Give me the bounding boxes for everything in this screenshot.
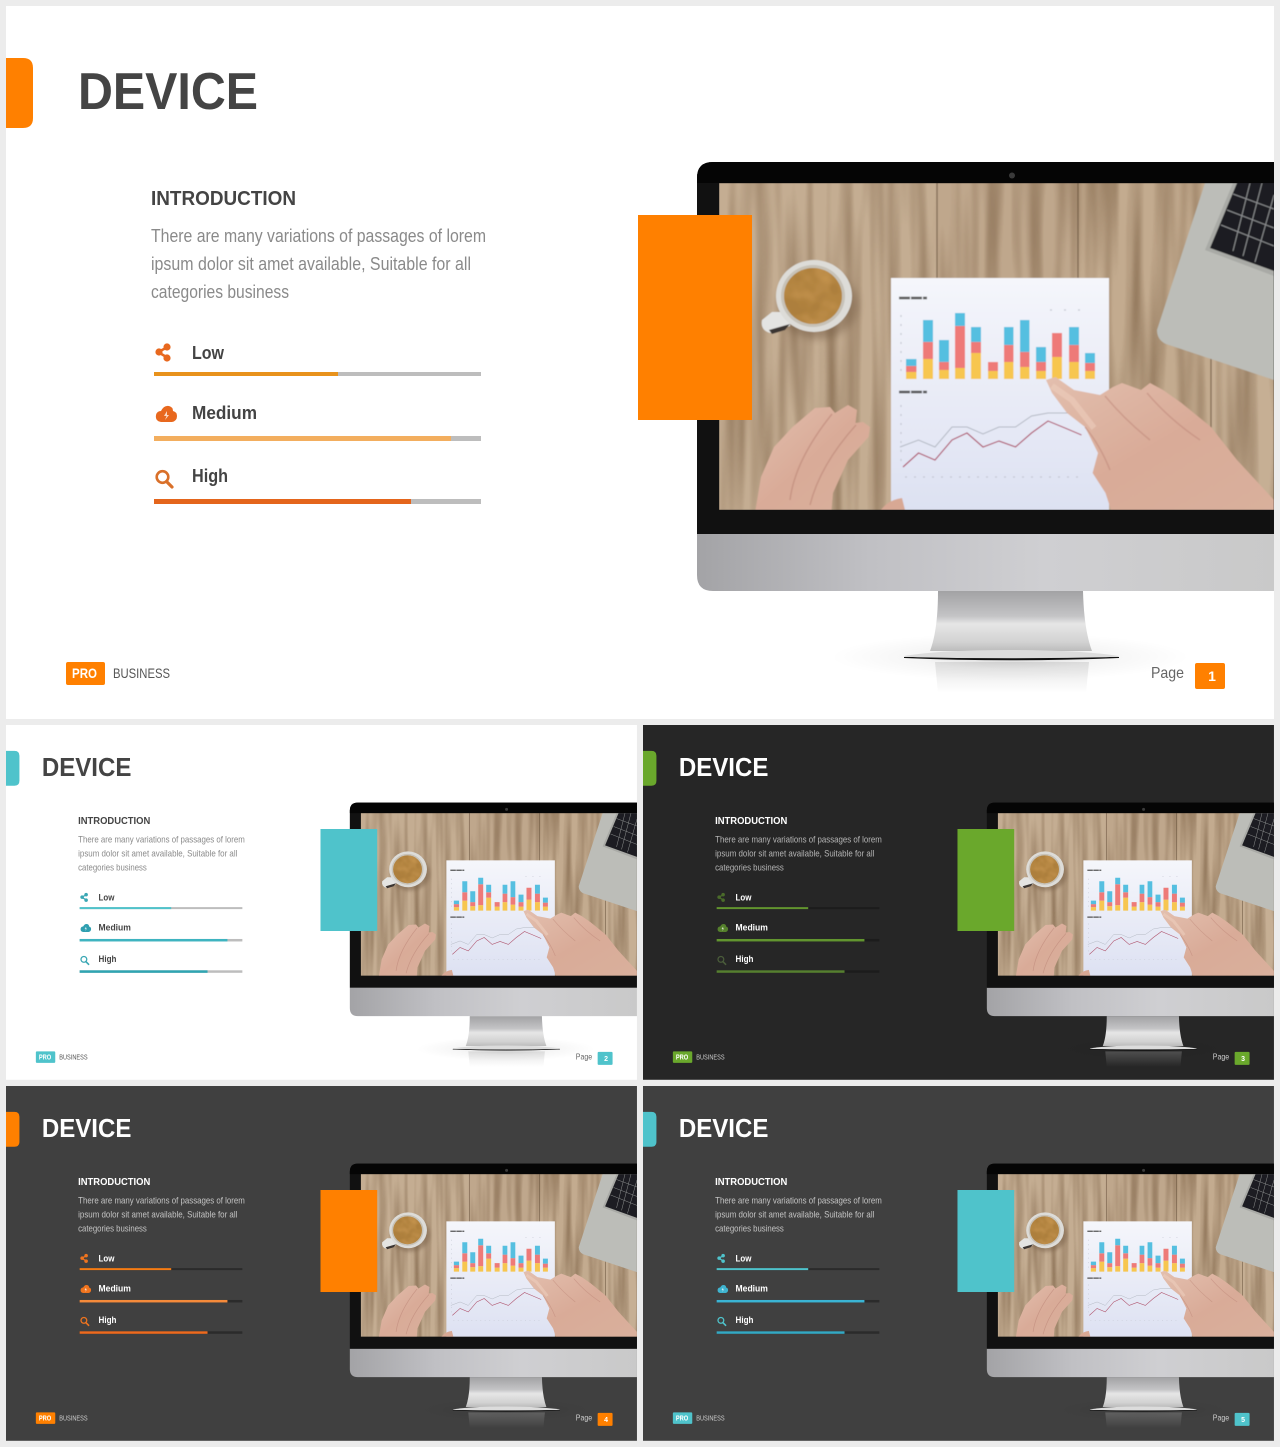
- slide 1: white orange large: [6, 6, 1274, 719]
- title tab: [6, 751, 19, 786]
- title tab: [6, 1112, 19, 1147]
- paragraph: [715, 1195, 882, 1233]
- title tab: [6, 58, 33, 128]
- meter: low: Low: [192, 343, 225, 363]
- meter: medium: [717, 923, 879, 941]
- paragraph: [78, 834, 245, 872]
- meter: high: High: [99, 954, 116, 964]
- paragraph: ipsum dolor sit amet available, Suitable for all: [78, 848, 237, 858]
- meter: medium: [154, 403, 481, 441]
- paragraph: There are many variations of passages of lorem: [151, 226, 486, 246]
- meter: high: High: [736, 954, 753, 964]
- paragraph: categories business: [78, 862, 147, 872]
- monitor: [987, 803, 1274, 1067]
- paragraph: categories business: [715, 862, 784, 872]
- meter: high: [154, 466, 481, 504]
- accent rectangle: [957, 829, 1014, 931]
- footer brand: PRO: [72, 665, 97, 681]
- paragraph: [715, 834, 882, 872]
- heading: INTRODUCTION: [151, 188, 296, 210]
- meter: medium: Medium: [99, 923, 131, 933]
- page number: 2: [604, 1056, 608, 1063]
- footer brand: PRO: [39, 1415, 52, 1422]
- meter: low: Low: [736, 893, 752, 903]
- paragraph: ipsum dolor sit amet available, Suitable for all: [151, 254, 471, 274]
- meter: high: [80, 954, 242, 973]
- heading: INTRODUCTION: [78, 816, 150, 827]
- paragraph: categories business: [78, 1223, 147, 1233]
- monitor: [697, 162, 1274, 693]
- footer brand: BUSINESS: [113, 665, 170, 681]
- page number: 1: [1208, 668, 1216, 684]
- paragraph: ipsum dolor sit amet available, Suitable for all: [715, 1209, 874, 1219]
- accent rectangle: [957, 1190, 1014, 1292]
- page number: [576, 1413, 613, 1426]
- title: DEVICE: [42, 754, 131, 782]
- monitor: [350, 803, 637, 1067]
- title: DEVICE: [78, 63, 258, 121]
- page number: Page: [576, 1052, 593, 1061]
- meter: low: [717, 1254, 879, 1270]
- footer brand: BUSINESS: [59, 1415, 88, 1422]
- heading: INTRODUCTION: [715, 816, 787, 827]
- paragraph: [151, 226, 486, 302]
- meter: high: High: [99, 1315, 116, 1325]
- title: DEVICE: [42, 1115, 131, 1143]
- title: DEVICE: [679, 754, 768, 782]
- meter: low: [80, 1254, 242, 1270]
- accent rectangle: [320, 1190, 377, 1292]
- footer brand: [36, 1412, 88, 1424]
- heading: INTRODUCTION: [715, 1177, 787, 1188]
- slide 3: black green: [643, 725, 1274, 1080]
- paragraph: There are many variations of passages of lorem: [78, 834, 245, 844]
- slide 4: grey orange: [6, 1086, 637, 1441]
- page number: [576, 1052, 613, 1065]
- paragraph: There are many variations of passages of lorem: [78, 1195, 245, 1205]
- footer brand: BUSINESS: [59, 1054, 88, 1061]
- meter: low: [80, 893, 242, 909]
- meter: low: Low: [99, 893, 115, 903]
- paragraph: There are many variations of passages of lorem: [715, 834, 882, 844]
- footer brand: PRO: [39, 1054, 52, 1061]
- meter: medium: [80, 1284, 242, 1302]
- page number: Page: [576, 1413, 593, 1422]
- footer brand: PRO: [676, 1415, 689, 1422]
- meter: low: [717, 893, 879, 909]
- footer brand: [673, 1412, 725, 1424]
- footer brand: [66, 662, 170, 685]
- title: DEVICE: [679, 1115, 768, 1143]
- page number: [1151, 663, 1225, 689]
- paragraph: categories business: [151, 282, 289, 302]
- meter: medium: [717, 1284, 879, 1302]
- page number: 3: [1241, 1056, 1245, 1063]
- monitor: [987, 1164, 1274, 1428]
- meter: high: [717, 1315, 879, 1334]
- page number: Page: [1213, 1052, 1230, 1061]
- meter: low: Low: [736, 1254, 752, 1264]
- meter: high: [717, 954, 879, 973]
- footer brand: BUSINESS: [696, 1054, 725, 1061]
- page number: Page: [1151, 665, 1184, 682]
- meter: medium: Medium: [736, 1284, 768, 1294]
- paragraph: ipsum dolor sit amet available, Suitable for all: [78, 1209, 237, 1219]
- footer brand: [673, 1051, 725, 1063]
- slide 2: white teal: [6, 725, 637, 1080]
- meter: high: High: [736, 1315, 753, 1325]
- meter: high: [80, 1315, 242, 1334]
- page number: 5: [1241, 1417, 1245, 1424]
- meter: medium: Medium: [736, 923, 768, 933]
- meter: low: [154, 343, 481, 376]
- heading: INTRODUCTION: [78, 1177, 150, 1188]
- footer brand: BUSINESS: [696, 1415, 725, 1422]
- meter: medium: Medium: [192, 403, 257, 423]
- monitor: [350, 1164, 637, 1428]
- title tab: [643, 1112, 656, 1147]
- paragraph: ipsum dolor sit amet available, Suitable for all: [715, 848, 874, 858]
- page number: [1213, 1052, 1250, 1065]
- accent rectangle: [320, 829, 377, 931]
- page number: 4: [604, 1417, 608, 1424]
- footer brand: PRO: [676, 1054, 689, 1061]
- page number: Page: [1213, 1413, 1230, 1422]
- meter: high: High: [192, 466, 228, 486]
- meter: low: Low: [99, 1254, 115, 1264]
- paragraph: [78, 1195, 245, 1233]
- slide 5: grey teal: [643, 1086, 1274, 1441]
- paragraph: There are many variations of passages of lorem: [715, 1195, 882, 1205]
- page number: [1213, 1413, 1250, 1426]
- footer brand: [36, 1051, 88, 1063]
- accent rectangle: [638, 215, 752, 420]
- title tab: [643, 751, 656, 786]
- meter: medium: [80, 923, 242, 941]
- meter: medium: Medium: [99, 1284, 131, 1294]
- paragraph: categories business: [715, 1223, 784, 1233]
